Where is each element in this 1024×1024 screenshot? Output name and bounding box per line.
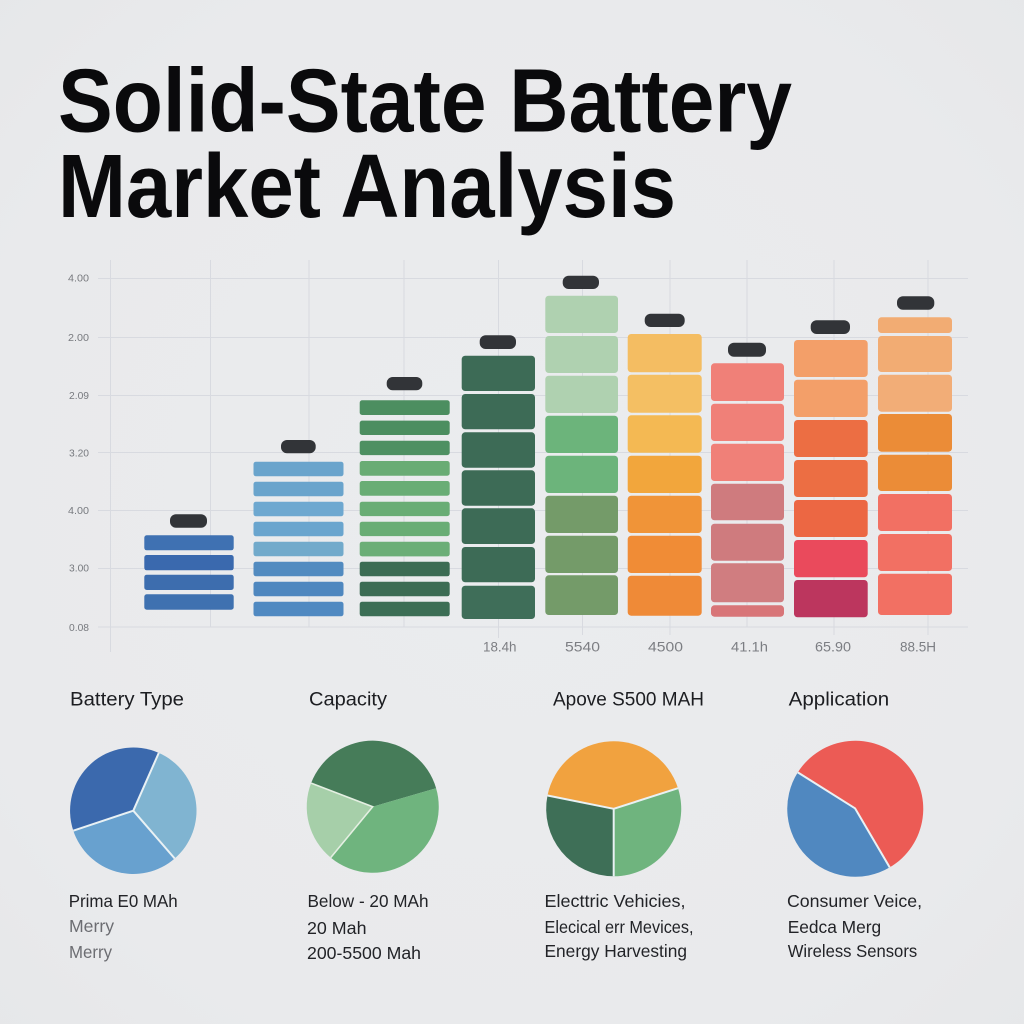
x-axis labels: [483, 640, 936, 654]
x-axis labels: 65.90: [815, 640, 851, 654]
bar 9: peach to salmon: [878, 296, 952, 615]
title: [58, 52, 792, 237]
legend: capacity: [307, 891, 428, 963]
bar 3: green: [360, 377, 450, 616]
heading: battery type: Battery Type: [70, 688, 184, 710]
y-axis labels: 4.00: [68, 505, 89, 517]
x-axis labels: 4500: [648, 640, 683, 654]
y-axis labels: 4.00: [68, 272, 89, 284]
title: Market Analysis: [58, 137, 676, 237]
bar 2: light blue: [254, 440, 344, 616]
x-axis labels: 5540: [565, 640, 600, 654]
legend: above 5500 mah: [544, 891, 694, 961]
pie chart: application: [787, 741, 923, 877]
y-axis labels: 2.09: [69, 390, 89, 402]
y-axis labels: 3.00: [69, 562, 89, 574]
legend: battery type: Prima E0 MAh: [69, 891, 178, 911]
panel: battery type: [69, 688, 197, 962]
legend: capacity: Below - 20 MAh: [308, 891, 428, 911]
bar 5: pale to olive green: [545, 276, 618, 615]
x-axis labels: 18.4h: [483, 640, 516, 654]
legend: above 5500 mah: Electtric Vehicies,: [544, 891, 686, 911]
heading: application: Application: [789, 688, 889, 710]
legend: battery type: Merry: [69, 942, 112, 962]
bar 8: orange to crimson: [794, 320, 868, 617]
legend: battery type: [69, 891, 178, 962]
bar 4: dark green: [462, 335, 535, 619]
panel: above 5500 mah: [544, 688, 704, 961]
heading: capacity: Capacity: [309, 688, 387, 710]
x-axis labels: 88.5H: [900, 640, 936, 654]
y-axis labels: 3.20: [69, 448, 89, 460]
legend: application: [787, 891, 922, 961]
legend: capacity: 20 Mah: [307, 918, 366, 938]
pie chart: capacity: [307, 741, 439, 873]
bar 1: blue: [144, 514, 234, 610]
pie chart: battery type: [70, 748, 197, 874]
y-axis labels: [68, 272, 89, 634]
title: Solid-State Battery: [58, 52, 792, 152]
y-axis labels: 2.00: [68, 332, 89, 344]
legend: application: Wireless Sensors: [788, 941, 917, 961]
x-axis labels: 41.1h: [731, 640, 768, 654]
y-axis labels: 0.08: [69, 622, 89, 634]
bar chart: battery-shaped stacked bars: [68, 260, 968, 654]
heading: above 5500 mah: Apove S500 MAH: [553, 688, 704, 710]
legend: battery type: Merry: [69, 916, 114, 936]
legend: capacity: 200-5500 Mah: [307, 943, 421, 963]
legend: application: Consumer Veice,: [787, 891, 922, 911]
bar 7: coral to dusty rose: [711, 343, 784, 617]
pie chart: above 5500 mah: [546, 741, 681, 876]
bar 6: yellow to orange: [628, 314, 702, 616]
legend: application: Eedca Merg: [788, 917, 881, 937]
panel: capacity: [307, 688, 439, 963]
legend: above 5500 mah: Elecical err Mevices,: [544, 917, 694, 937]
panel: application: [787, 688, 923, 961]
legend: above 5500 mah: Energy Harvesting: [544, 941, 687, 961]
